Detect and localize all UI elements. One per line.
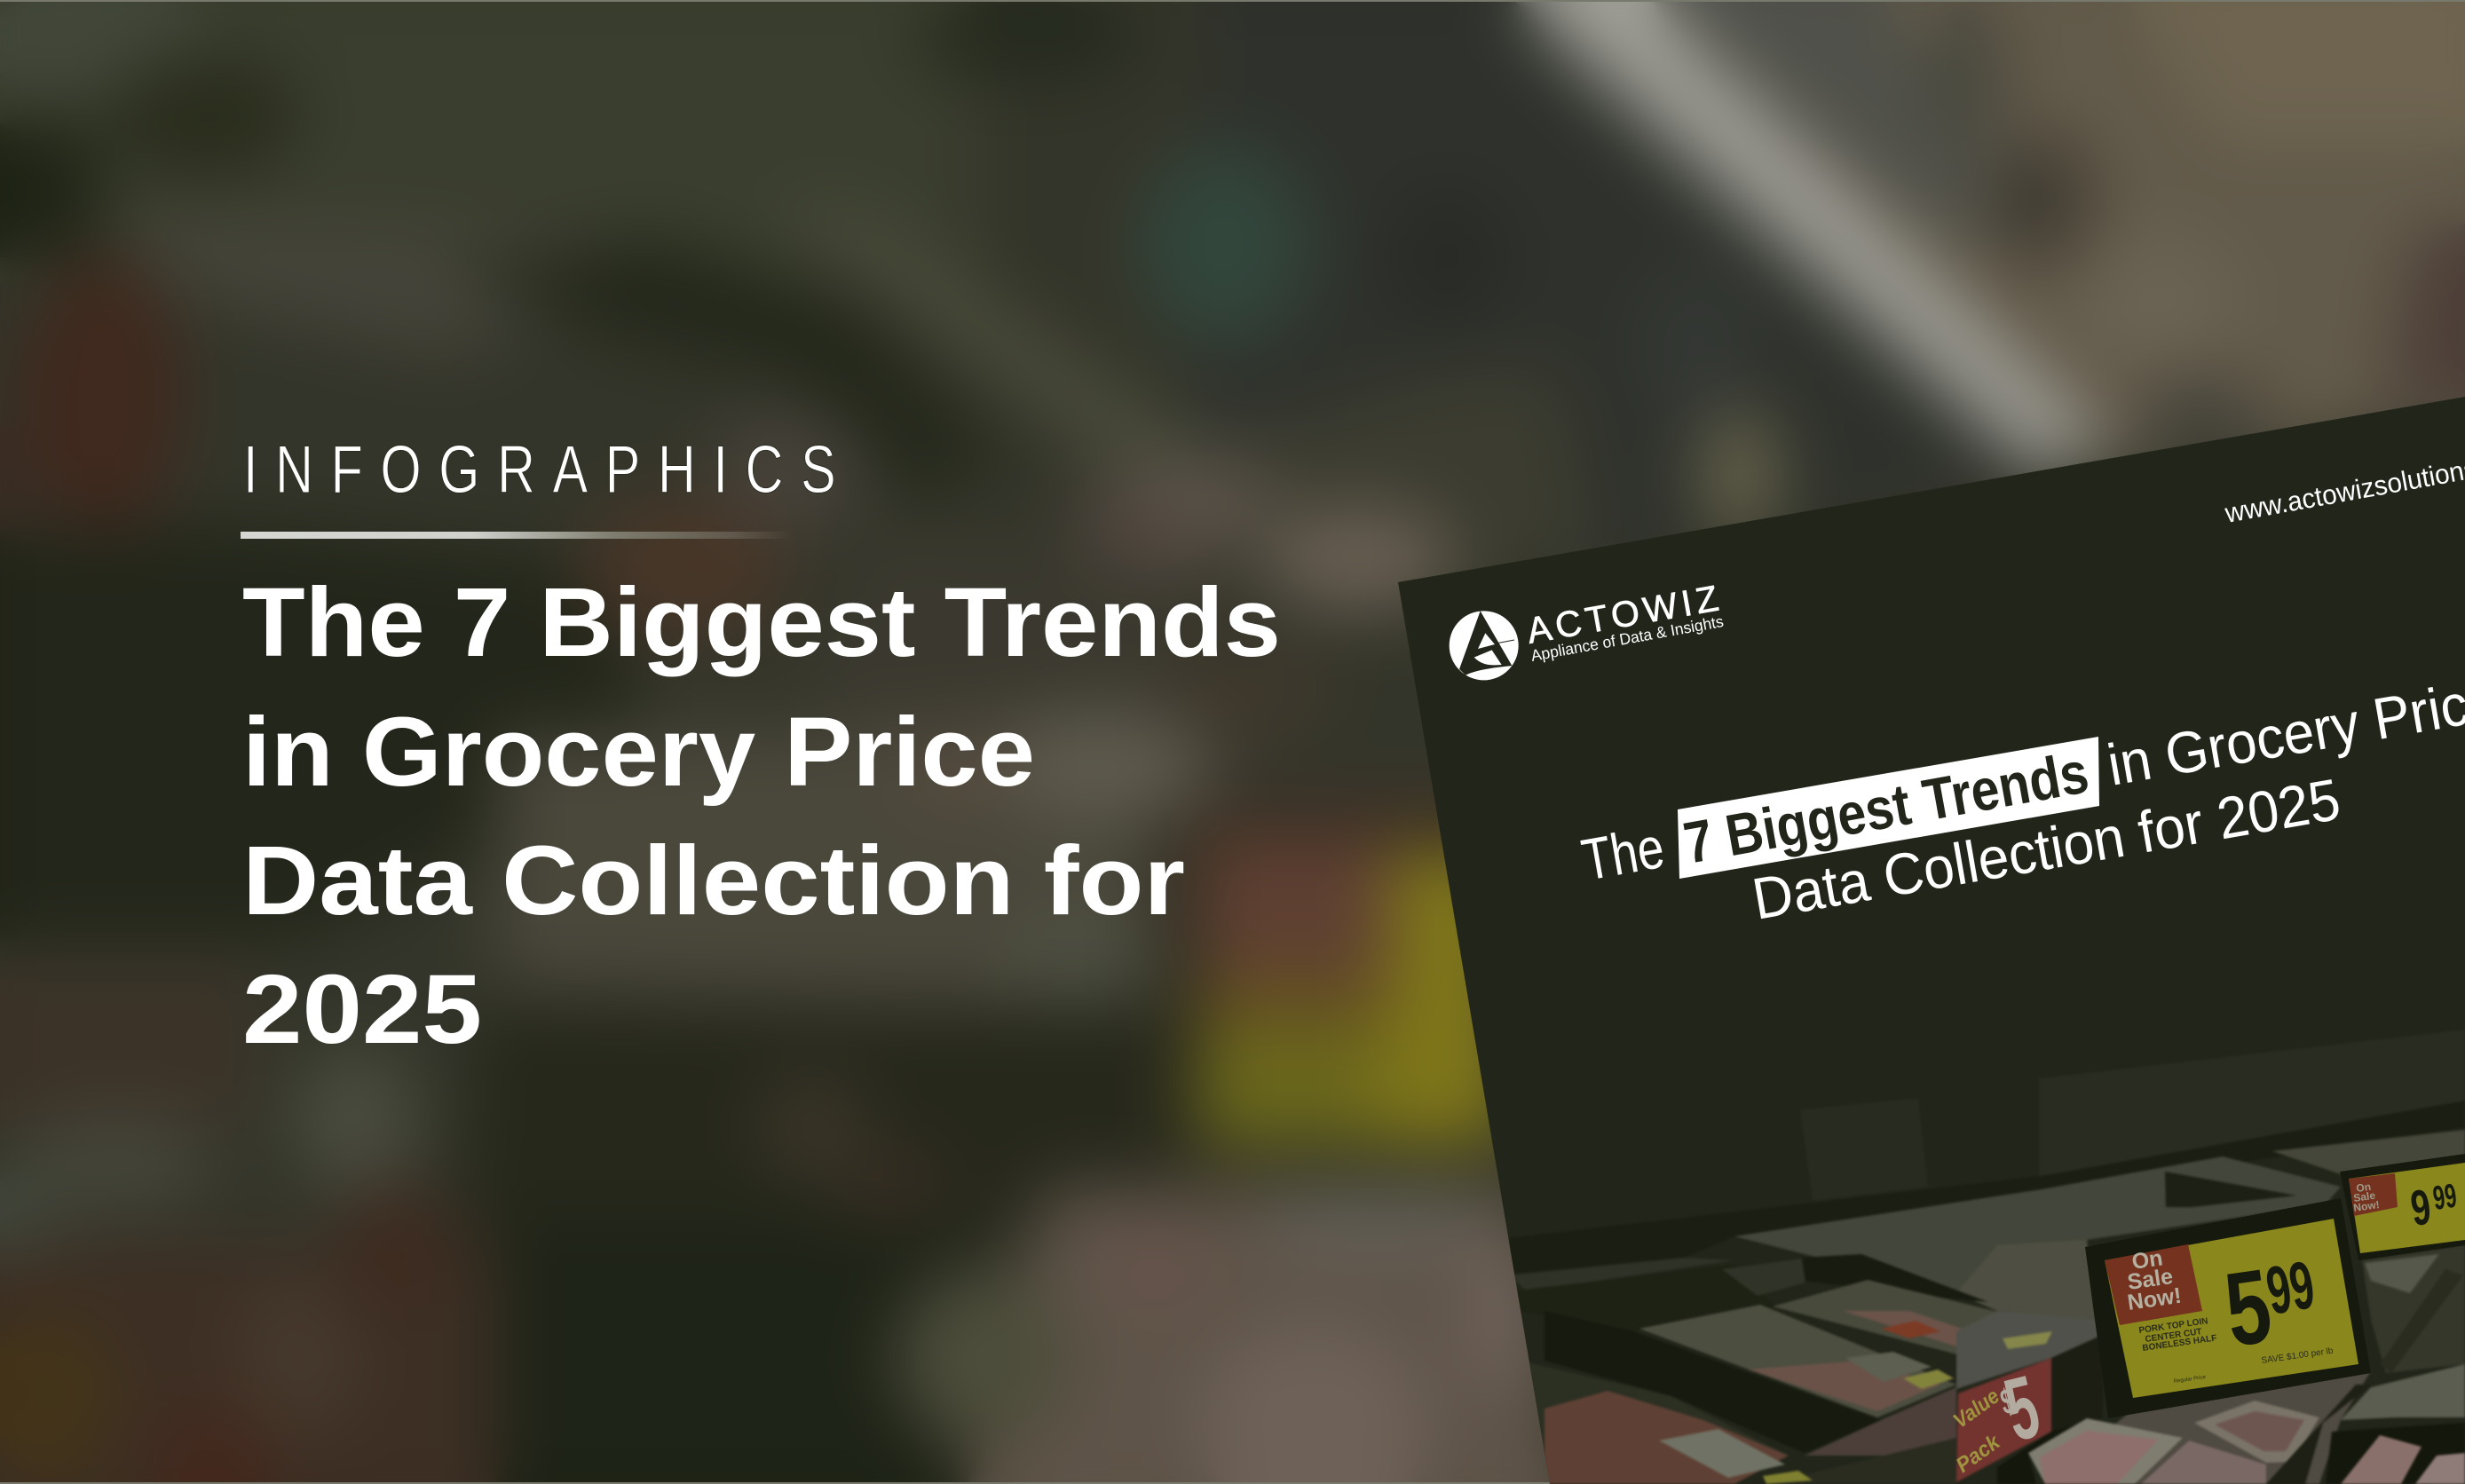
logo tagline: Appliance of Data & Insights <box>1529 612 1725 665</box>
sign: Value $5 Pack <box>1953 1376 2039 1473</box>
card title <box>1577 666 2465 932</box>
price tag: 5.99: Now! <box>2126 1283 2183 1315</box>
photo: grocery meat display <box>1509 1129 2465 1484</box>
price tag: 5.99 <box>2085 1198 2371 1418</box>
bottom-middle grey-pink <box>968 1180 1571 1484</box>
price tag: 5.99: Regular Price <box>2173 1375 2207 1385</box>
red and yellow signage <box>1181 799 1509 861</box>
price tag: 5.99: 5 <box>2218 1248 2278 1370</box>
price tag: 5.99: BONELESS HALF <box>2142 1333 2217 1354</box>
price tag: 9.99: 99 <box>2430 1176 2459 1217</box>
main heading <box>242 568 1281 1064</box>
price tag: 5.99: Sale <box>2126 1264 2175 1295</box>
main heading: in Grocery Price <box>242 698 1035 807</box>
main heading: Data Collection for <box>242 826 1185 935</box>
price tag: 5.99: PORK TOP LOIN <box>2138 1316 2208 1336</box>
price tag: 9.99: Now! <box>2352 1198 2380 1214</box>
title highlight box <box>1678 737 2099 879</box>
title second line: Data Collection for 2025 <box>1748 766 2345 932</box>
price tag: 9.99: Sale <box>2352 1189 2376 1204</box>
price tag: 9.99 <box>2340 1154 2465 1260</box>
price tag: 5.99: On <box>2130 1245 2164 1275</box>
sign: Value $5 Pack: 5 <box>1995 1357 2049 1460</box>
main heading: The 7 Biggest Trends <box>242 568 1281 677</box>
mid band behind title <box>497 719 1189 1012</box>
divider rule <box>241 532 791 539</box>
price tag: 5.99: CENTER CUT <box>2145 1327 2202 1345</box>
highlighted words: 7 Biggest Trends <box>1679 738 2093 876</box>
logo mark <box>1450 611 1519 680</box>
left and bottom-left <box>0 967 249 1127</box>
price tag: 5.99: 99 <box>2261 1248 2320 1330</box>
main heading: 2025 <box>242 955 482 1064</box>
price tag: 9.99: On <box>2355 1180 2372 1195</box>
upper right <box>1598 0 2465 470</box>
top-left <box>0 0 976 284</box>
card title: The <box>1577 814 1669 893</box>
price tag: 9.99: 9 <box>2407 1180 2434 1237</box>
sign: Value $5 Pack: Pack <box>1952 1429 2005 1478</box>
sign: Value $5 Pack: $ <box>1996 1380 2018 1422</box>
logo wordmark: ACTOWIZ <box>1524 578 1721 651</box>
panel: tilted infographic preview card <box>1398 397 2465 1484</box>
label: INFOGRAPHICS: INFOGRAPHICS <box>243 432 836 508</box>
price tag: 5.99: SAVE $1.00 per lb <box>2261 1346 2335 1366</box>
sign: Value $5 Pack: Value <box>1949 1385 2004 1433</box>
